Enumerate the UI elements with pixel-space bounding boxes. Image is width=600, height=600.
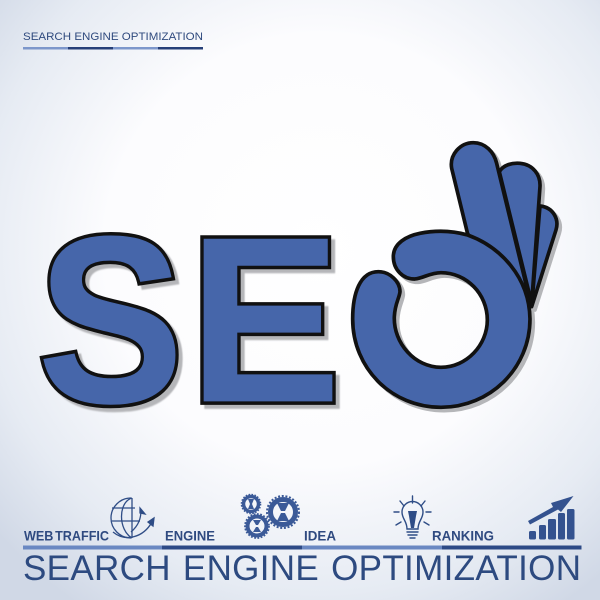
medium gear	[245, 514, 269, 538]
label: idea: IDEA	[304, 528, 336, 544]
icon: growth chart	[528, 496, 574, 540]
letter S: S	[38, 188, 184, 453]
hand shadow	[356, 146, 560, 411]
chart arrow	[528, 496, 574, 524]
letter E: E	[193, 193, 345, 456]
middle finger	[499, 163, 540, 303]
top heading rule	[23, 47, 203, 50]
letter E: E	[189, 189, 341, 452]
letter S: S	[38, 188, 184, 453]
letter E: E	[189, 189, 341, 452]
bottom title: SEARCH ENGINE OPTIMIZATION	[23, 549, 581, 588]
index finger	[451, 143, 531, 303]
letter S: S	[42, 192, 188, 457]
OK hand forming the letter O	[353, 143, 560, 411]
thumb and ring of hand	[353, 231, 530, 407]
label: engine: ENGINE	[165, 528, 215, 544]
small gear	[242, 494, 260, 514]
large gear	[267, 496, 299, 528]
label: web traffic: WEB TRAFFIC	[24, 528, 109, 544]
label: ranking: RANKING	[432, 528, 494, 544]
icon: gears	[242, 494, 299, 538]
bottom rule	[23, 546, 582, 550]
chart bars	[529, 509, 574, 540]
top heading text: SEARCH ENGINE OPTIMIZATION	[23, 31, 203, 43]
icon: globe with arrows	[111, 498, 154, 538]
icon: light bulb	[394, 496, 431, 538]
ring finger and little finger	[532, 206, 557, 307]
